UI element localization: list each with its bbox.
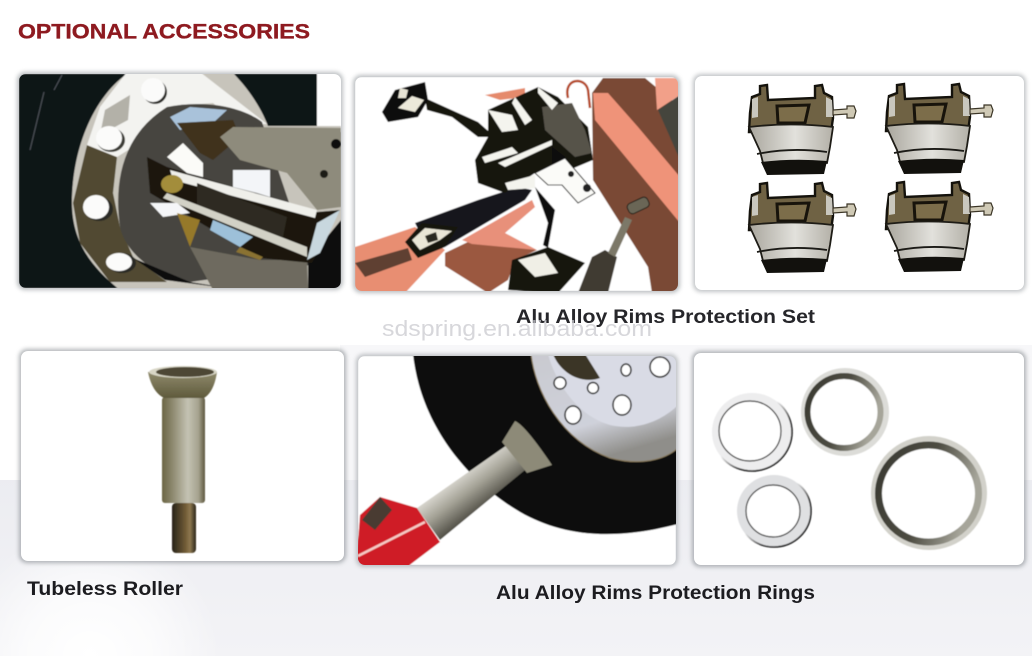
lower arm bbox=[415, 187, 532, 247]
panel: tubeless roller bbox=[19, 349, 346, 563]
caption: tubeless roller: Tubeless Roller bbox=[27, 578, 183, 600]
lower arm head bbox=[405, 223, 458, 258]
upper arm head bbox=[382, 82, 428, 122]
icon: roller pin bbox=[148, 366, 217, 553]
alloy rim bbox=[531, 354, 678, 462]
lower assembly bbox=[508, 196, 651, 293]
caption: protection rings: Alu Alloy Rims Protection Rings bbox=[496, 582, 815, 604]
caption: protection set: Alu Alloy Rims Protection Set bbox=[516, 306, 816, 328]
ring top left bbox=[712, 393, 792, 471]
part top right bbox=[886, 84, 993, 174]
watermark: sdspring.en.alibaba.com bbox=[382, 316, 652, 341]
bolt holes bbox=[83, 78, 167, 273]
part bottom right bbox=[886, 182, 993, 272]
panel: wheel hub close-up photo bbox=[17, 72, 343, 290]
part bottom left bbox=[749, 183, 856, 273]
rim bbox=[72, 72, 341, 290]
ring bottom left bbox=[737, 475, 811, 547]
ring large right bbox=[871, 436, 987, 550]
panel: protection rings bbox=[692, 351, 1026, 567]
roller shaft bbox=[417, 445, 525, 540]
orange frame bbox=[355, 78, 680, 293]
panel: roller against tyre photo bbox=[356, 354, 678, 567]
upper arm bbox=[425, 98, 495, 137]
red hydraulic jack bbox=[356, 497, 440, 567]
part top left bbox=[749, 85, 856, 175]
ring top centre bbox=[801, 368, 889, 456]
roller cup bbox=[502, 421, 552, 473]
panel: spring arm assembly photo bbox=[353, 75, 680, 293]
central assembly bbox=[475, 87, 595, 203]
thin arm bbox=[535, 187, 555, 248]
tyre bbox=[413, 354, 678, 534]
title: OPTIONAL ACCESSORIES bbox=[18, 20, 310, 44]
panel: four protection set parts bbox=[693, 74, 1026, 292]
